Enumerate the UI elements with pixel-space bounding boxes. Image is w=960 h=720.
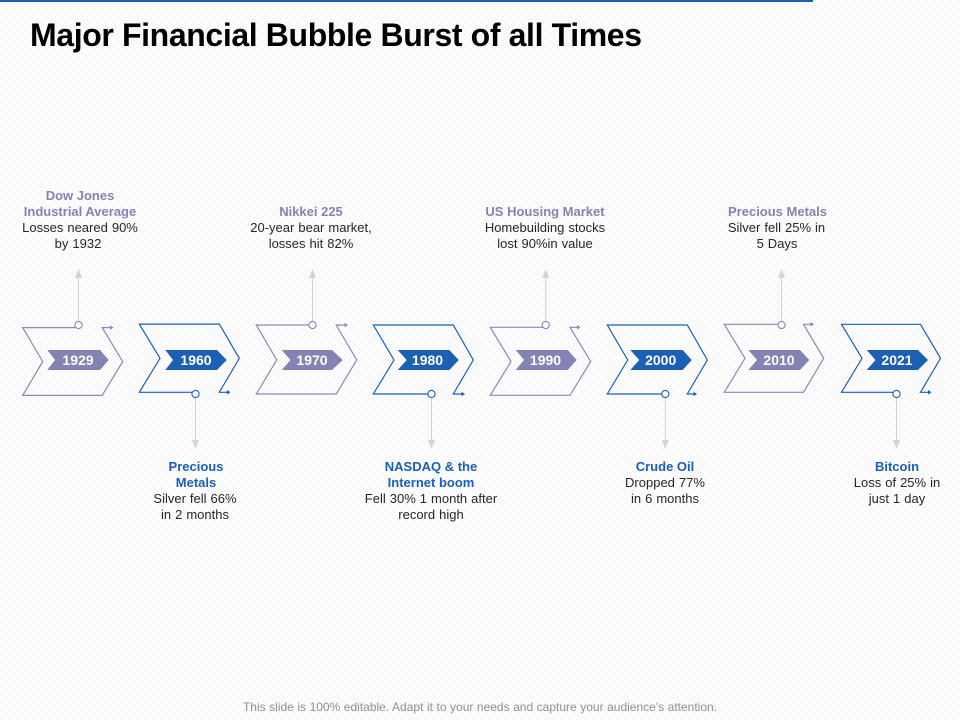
milestone: 2021: [842, 324, 940, 506]
milestone: 1980: record high: [398, 507, 464, 522]
milestone: 1960: [139, 324, 239, 522]
title: Major Financial Bubble Burst of all Times: [30, 17, 642, 53]
milestone: 2021: Loss of 25% in: [854, 475, 940, 490]
milestone: 1929: 1929: [62, 352, 94, 368]
milestone: 1960: Silver fell 66%: [153, 491, 237, 506]
milestone: 1970: 20-year bear market,: [250, 220, 372, 235]
milestone: 2000: Dropped 77%: [625, 475, 705, 490]
milestone: 1960: 1960: [180, 352, 212, 368]
milestone: 1929: Dow Jones: [46, 188, 114, 203]
milestone: 2000: in 6 months: [631, 491, 699, 506]
milestone: 1970: Nikkei 225: [279, 204, 343, 219]
milestone: 1970: [250, 204, 372, 394]
milestone: 1960: Precious: [169, 459, 223, 474]
milestone: 2021: just 1 day: [868, 491, 926, 506]
milestone: 1980: Internet boom: [388, 475, 474, 490]
milestone: 2000: 2000: [645, 352, 676, 368]
milestone: 1980: 1980: [412, 352, 443, 368]
milestone: 1990: Homebuilding stocks: [485, 220, 606, 235]
milestone: 2010: Precious Metals: [728, 204, 827, 219]
milestone: 1970: losses hit 82%: [269, 236, 354, 251]
top accent bar: [0, 0, 813, 2]
milestone: 1929: Losses neared 90%: [22, 220, 138, 235]
milestone: 2010: [724, 204, 827, 392]
milestone: 1929: [22, 188, 138, 395]
footer note: This slide is 100% editable. Adapt it to your needs and capture your audience's attention.: [243, 700, 717, 714]
milestone: 1990: 1990: [530, 352, 561, 368]
milestone: 1980: [365, 325, 498, 522]
milestone: 2000: [607, 325, 707, 506]
milestone: 1929: by 1932: [55, 236, 101, 251]
milestone: 1990: [485, 204, 606, 395]
milestone: 1980: Fell 30% 1 month after: [365, 491, 498, 506]
milestone: 1970: 1970: [296, 352, 328, 368]
milestone: 2021: 2021: [881, 352, 913, 368]
milestone: 1960: in 2 months: [161, 507, 229, 522]
milestone: 1929: Industrial Average: [24, 204, 136, 219]
milestone: 2010: 2010: [763, 352, 795, 368]
milestone: 1980: NASDAQ & the: [385, 459, 477, 474]
milestone: 2010: Silver fell 25% in: [728, 220, 825, 235]
milestone: 2021: Bitcoin: [875, 459, 919, 474]
milestone: 1960: Metals: [176, 475, 216, 490]
milestone: 1990: US Housing Market: [485, 204, 605, 219]
milestone: 1990: lost 90%in value: [497, 236, 593, 251]
milestone: 2000: Crude Oil: [636, 459, 694, 474]
milestone: 2010: 5 Days: [757, 236, 798, 251]
